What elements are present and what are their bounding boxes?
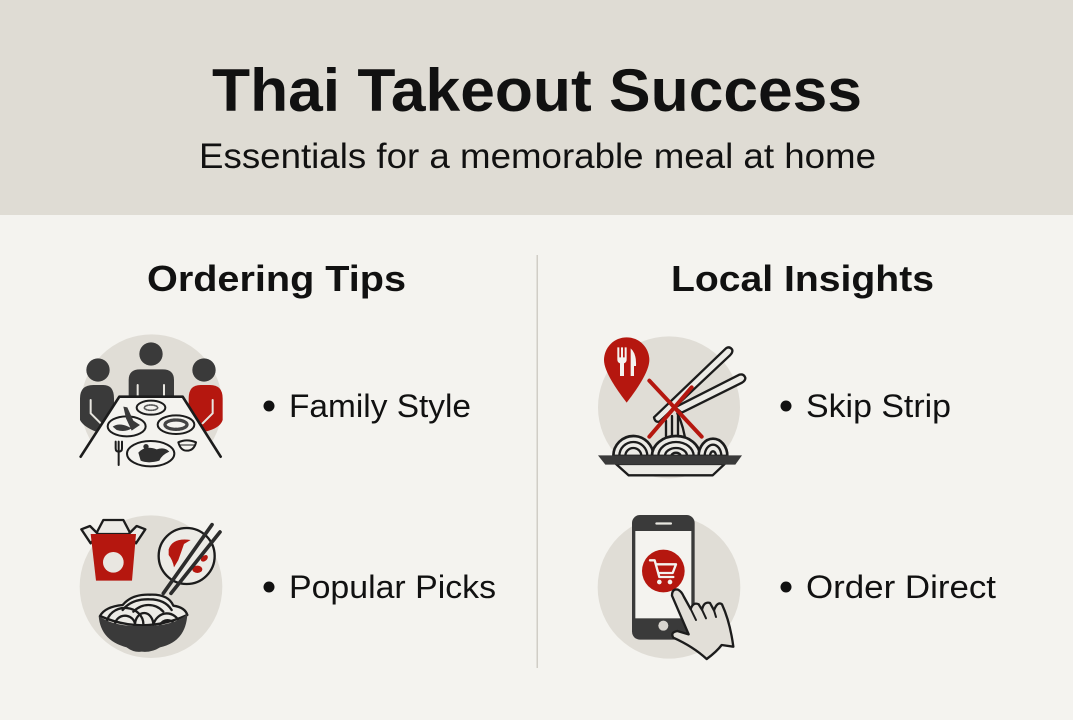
table <box>81 397 221 477</box>
people <box>80 342 223 432</box>
dishes <box>108 401 196 466</box>
bullet: popular picks <box>264 582 274 592</box>
noodle strands <box>666 413 686 445</box>
chopsticks <box>654 347 745 422</box>
bullet: order direct <box>780 582 792 592</box>
bullet: family style <box>264 400 274 412</box>
label: popular picks: Popular Picks <box>289 569 496 605</box>
noodle bowl <box>100 595 187 625</box>
plate <box>616 464 725 475</box>
cart badge <box>642 550 685 592</box>
label: skip strip: Skip Strip <box>806 388 951 424</box>
label: family style: Family Style <box>289 388 471 424</box>
map pin <box>604 337 649 403</box>
icon: skip strip <box>598 336 745 478</box>
heading: local insights: Local Insights <box>671 258 934 299</box>
header band <box>0 0 1073 215</box>
phone <box>632 515 695 640</box>
takeout box <box>81 520 145 581</box>
label: order direct: Order Direct <box>806 569 996 605</box>
pointing hand <box>672 589 733 659</box>
red cross <box>649 381 702 437</box>
bullet: skip strip <box>780 400 792 412</box>
title: Thai Takeout Success <box>212 57 862 124</box>
icon: family style table <box>80 334 223 477</box>
icon: takeout box, dish and noodles <box>80 515 222 658</box>
subtitle: Essentials for a memorable meal at home <box>199 137 876 176</box>
noodles <box>613 436 727 456</box>
heading: ordering tips: Ordering Tips <box>147 258 406 299</box>
sauce dish <box>159 525 220 593</box>
icon: order direct phone <box>598 515 740 659</box>
